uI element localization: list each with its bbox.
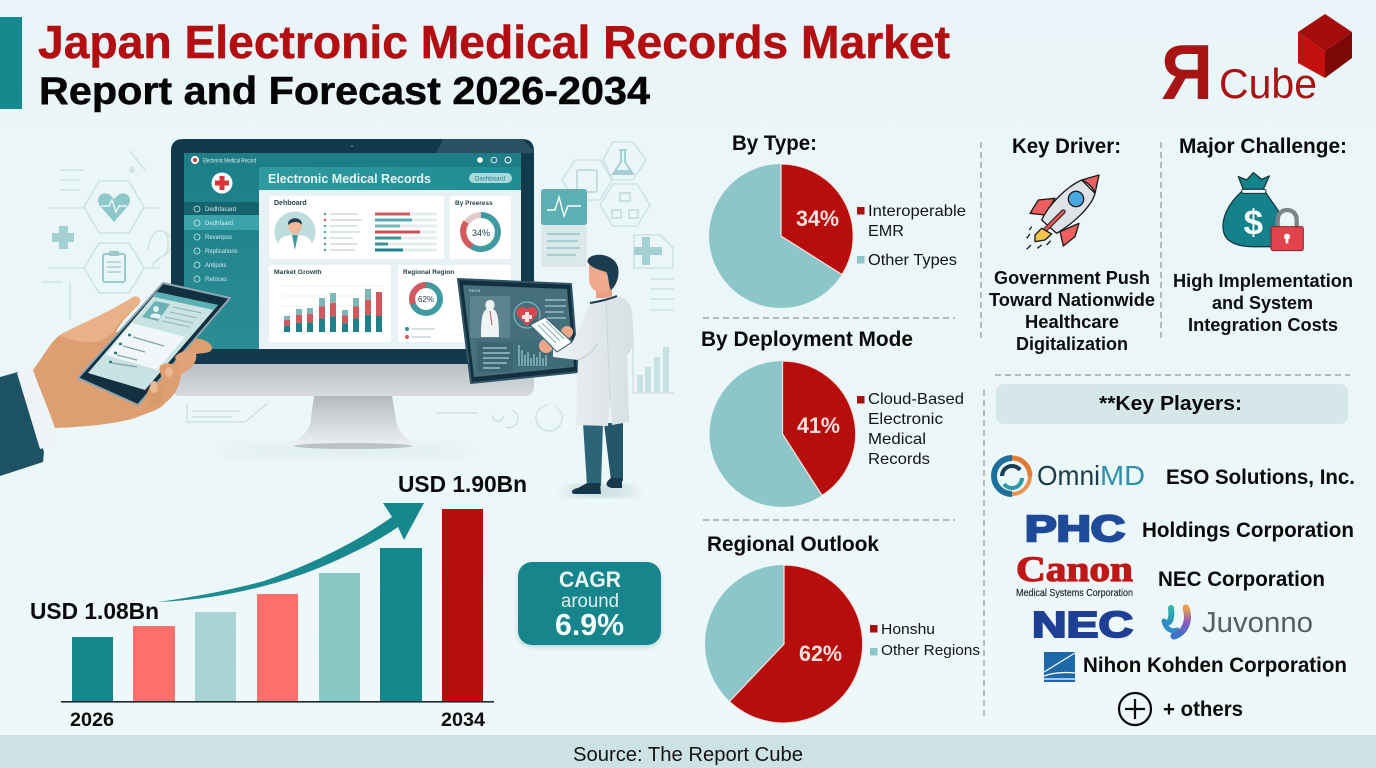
screen: Retoces xyxy=(205,277,227,283)
icon: flow hexagon xyxy=(600,184,650,226)
heading: Key Driver: xyxy=(1012,135,1121,158)
legend: Records xyxy=(868,451,930,468)
icon: clipboard hexagon xyxy=(84,243,144,293)
footer source bar xyxy=(0,735,1376,768)
logo: RCube: Cube xyxy=(1219,60,1317,107)
heading: By Type: xyxy=(732,132,817,155)
heading pill: **Key Players: xyxy=(1099,393,1242,415)
logo: Canon xyxy=(1016,549,1133,599)
legend: Other Regions xyxy=(881,642,980,659)
heading: Major Challenge: xyxy=(1179,135,1347,158)
logo: OmniMD: MD xyxy=(1100,460,1145,491)
phone xyxy=(78,283,230,405)
arrow: growth trend xyxy=(158,503,424,602)
card: market growth chart: Market Growth xyxy=(274,269,322,276)
illustration: tablet: REGS xyxy=(469,288,481,293)
legend: Honshu xyxy=(881,621,935,638)
company name: Nihon Kohden Corporation xyxy=(1083,654,1347,677)
heading: Regional Outlook xyxy=(707,533,879,556)
divider xyxy=(703,519,955,521)
card: by progress: By Preeress xyxy=(455,200,493,207)
pie chart xyxy=(710,361,856,507)
hand xyxy=(33,297,212,428)
pie chart: 62% xyxy=(799,641,842,666)
legend: Other Types xyxy=(868,252,957,269)
footer source bar: Source: The Report Cube xyxy=(573,744,803,766)
card: dashboard: Dehboard xyxy=(274,200,307,207)
screen: Revenpos xyxy=(205,235,232,241)
text block xyxy=(989,267,1155,354)
company name: Holdings Corporation xyxy=(1142,519,1354,542)
pie chart xyxy=(709,164,853,308)
text block: Digitalization xyxy=(1016,333,1128,354)
illustration: tablet xyxy=(458,279,578,383)
text block: Toward Nationwide xyxy=(989,289,1155,310)
pie chart: 41% xyxy=(797,413,840,438)
icon: money bag with lock: $ xyxy=(1244,203,1263,242)
card: market growth chart xyxy=(269,265,391,342)
illustration: doctor xyxy=(530,255,636,497)
icon: stethoscope xyxy=(148,231,173,268)
card: by progress xyxy=(450,196,511,259)
callout: CAGR: CAGR xyxy=(559,567,621,592)
screen: Dedhfacard xyxy=(205,207,236,213)
icon: heart hexagon xyxy=(84,181,144,233)
text block: Government Push xyxy=(994,267,1150,288)
legend: Medical xyxy=(868,431,926,448)
company name: ESO Solutions, Inc. xyxy=(1166,466,1355,489)
value label: 2034: USD 1.90Bn xyxy=(398,471,527,497)
header band xyxy=(259,167,521,190)
hair xyxy=(588,255,619,290)
ring decoration xyxy=(436,405,562,431)
stand xyxy=(294,396,412,447)
icon: flask hexagon xyxy=(603,142,646,180)
text block: Integration Costs xyxy=(1188,314,1338,335)
card: regional xyxy=(398,265,511,342)
icon: money bag with lock xyxy=(1223,173,1303,251)
sleeve xyxy=(0,372,44,476)
screen: Electronic Medical Record xyxy=(203,158,256,164)
text block: Healthcare xyxy=(1025,311,1119,332)
logo: OmniMD xyxy=(994,458,1145,494)
bar decoration xyxy=(633,345,674,393)
shoes xyxy=(572,483,601,494)
screen: Antipols xyxy=(205,263,226,269)
divider xyxy=(703,317,955,319)
icon: plus circle xyxy=(1119,693,1151,725)
logo: PHC: PHC xyxy=(1025,508,1125,549)
legend xyxy=(857,391,964,468)
text block: High Implementation xyxy=(1173,270,1353,291)
card: regional: 62% xyxy=(418,295,434,304)
callout: CAGR: around xyxy=(561,591,619,612)
logo: Juvonno: Juvonno xyxy=(1202,607,1313,639)
screen: Replications xyxy=(205,249,238,255)
callout: CAGR xyxy=(518,562,661,645)
illustration: hand holding phone xyxy=(0,283,230,476)
panel: regional outlook xyxy=(705,533,980,723)
screen: Dedhfaard xyxy=(205,221,233,227)
icon: cross xyxy=(52,226,74,249)
logo: NEC: NEC xyxy=(1032,604,1133,645)
soft shadow xyxy=(215,441,475,459)
others label: + others xyxy=(1163,698,1243,721)
clipboard xyxy=(530,317,572,352)
chin xyxy=(171,360,534,396)
bar chart: market growth 2026 to 2034: 2026 xyxy=(70,710,114,731)
legend xyxy=(857,203,966,269)
icon: clipboard hexagon top xyxy=(562,160,612,200)
logo: Nihon Kohden xyxy=(1044,652,1075,682)
card: dashboard xyxy=(269,196,444,259)
panel: key driver xyxy=(989,135,1155,354)
coat xyxy=(553,295,634,426)
column dividers xyxy=(981,142,1350,720)
top bar xyxy=(184,153,521,167)
illustration: desktop monitor xyxy=(171,139,534,459)
pie chart: 34% xyxy=(796,206,839,231)
legend: EMR xyxy=(868,223,904,240)
value label: 2026: USD 1.08Bn xyxy=(30,598,159,624)
icon: document cross xyxy=(634,235,673,268)
logo: RCube xyxy=(1161,14,1352,116)
callout: CAGR: 6.9% xyxy=(555,607,624,642)
neck and face xyxy=(596,282,612,298)
screen xyxy=(184,153,521,349)
shadow xyxy=(564,485,636,497)
panel: by deployment mode xyxy=(701,328,964,507)
text block xyxy=(1173,270,1353,335)
text box decoration xyxy=(187,403,268,422)
cuff xyxy=(17,369,57,449)
icon: rocket xyxy=(1027,175,1099,249)
fingers xyxy=(146,382,163,407)
pie chart xyxy=(705,565,863,723)
sidebar xyxy=(184,167,259,349)
logo: OmniMD: Omni xyxy=(1037,460,1100,491)
ECG document card xyxy=(541,189,587,267)
panel: major challenge xyxy=(1173,135,1353,335)
screen: Dashboard xyxy=(475,176,505,182)
screen: Electronic Medical Records xyxy=(268,171,431,186)
card: by progress: 34% xyxy=(472,228,490,238)
logo: Canon: Canon xyxy=(1016,549,1133,589)
text block: and System xyxy=(1212,292,1313,313)
logo: Canon: Medical Systems Corporation xyxy=(1016,587,1133,599)
bar chart: market growth 2026 to 2034: 2034 xyxy=(441,710,485,731)
legend xyxy=(870,621,980,659)
list decoration xyxy=(650,279,674,310)
logo: RCube: Я xyxy=(1161,28,1213,116)
card: regional: Regional Region xyxy=(403,269,454,276)
background medical icons xyxy=(42,142,674,431)
title: Japan Electronic Medical Records Market xyxy=(38,16,950,68)
title accent bar xyxy=(0,17,22,109)
hands xyxy=(539,339,553,353)
legend: Interoperable xyxy=(868,203,966,220)
bezel xyxy=(171,139,534,364)
panel: key players xyxy=(994,384,1355,725)
panel: by type xyxy=(709,132,966,308)
heading: By Deployment Mode xyxy=(701,328,913,351)
company name: NEC Corporation xyxy=(1158,568,1325,591)
legs xyxy=(583,423,603,486)
legend: Electronic xyxy=(868,411,943,428)
title: Report and Forecast 2026-2034 xyxy=(39,70,650,113)
bar chart: market growth 2026 to 2034 xyxy=(61,509,494,731)
legend: Cloud-Based xyxy=(868,391,964,408)
title xyxy=(38,16,950,113)
heading pill xyxy=(996,384,1348,424)
